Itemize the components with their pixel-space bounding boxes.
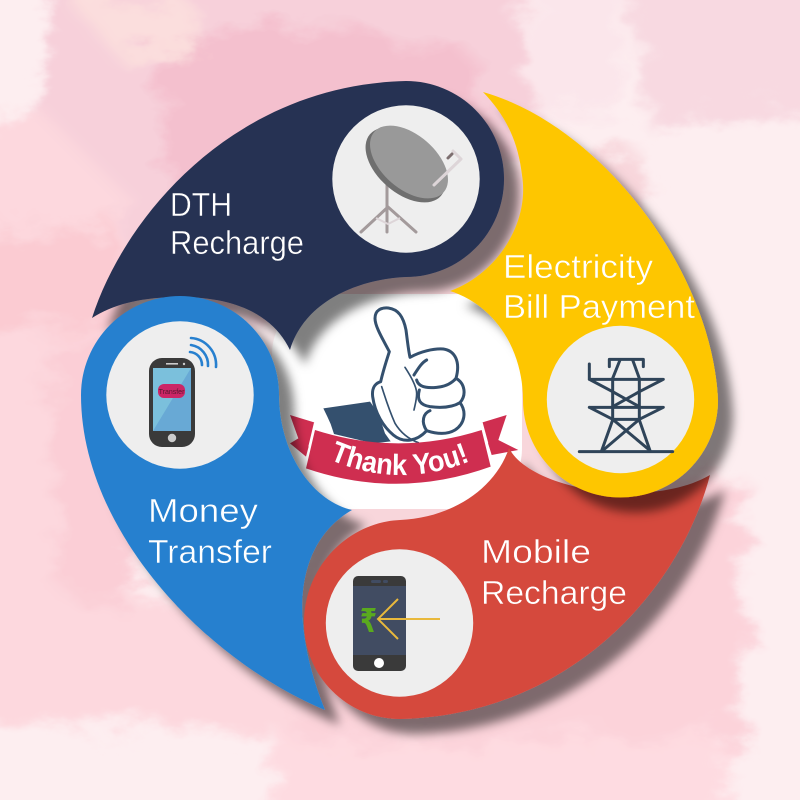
panel: mobile recharge: Recharge <box>481 574 627 611</box>
panel: money transfer: Transfer <box>148 533 272 570</box>
panel: DTH recharge: Recharge <box>170 224 304 261</box>
icon: phone with wifi signal: Transfer <box>159 389 185 396</box>
icon: thumb up hand <box>372 308 464 443</box>
center badge: thumbs up and thank you ribbon <box>272 294 522 509</box>
icon: phone with rupee and arrow <box>353 576 440 671</box>
ribbon: Thank You! <box>335 440 468 476</box>
panel: DTH recharge <box>92 81 504 350</box>
panel: money transfer: Money <box>148 492 259 529</box>
panel: mobile recharge <box>304 448 710 719</box>
icon: sleeve cuff <box>323 402 391 443</box>
panel: DTH recharge: DTH <box>170 186 232 223</box>
icon: transmission tower <box>579 359 673 452</box>
panel: mobile recharge: Mobile <box>481 533 591 570</box>
ribbon <box>290 415 518 484</box>
icon: phone with wifi signal <box>149 338 216 447</box>
icon: phone with rupee and arrow: ₹ <box>360 601 377 640</box>
icon: satellite dish <box>352 111 461 232</box>
panel: electricity bill payment: Bill Payment <box>503 288 695 325</box>
panel: electricity bill payment <box>450 92 718 498</box>
panel: money transfer <box>81 296 352 710</box>
center panel: white backing <box>272 294 522 509</box>
panel: electricity bill payment: Electricity <box>503 248 654 285</box>
